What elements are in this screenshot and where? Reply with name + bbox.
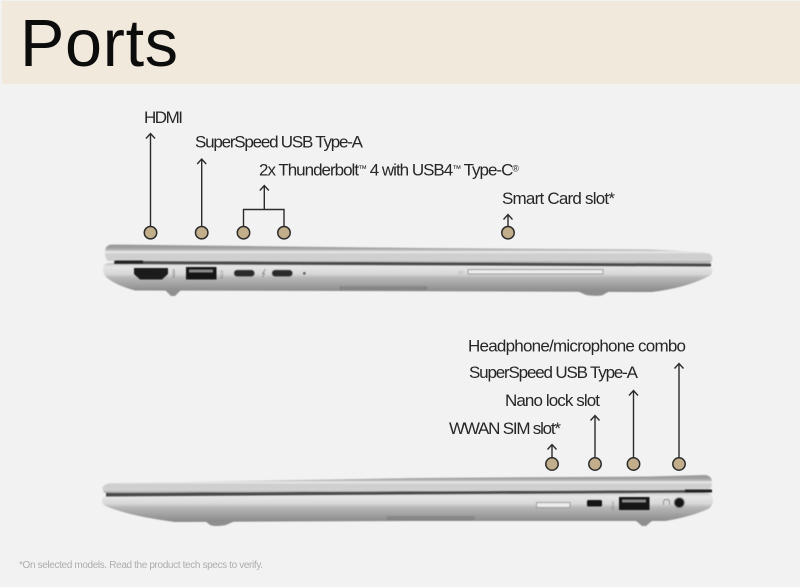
port: Thunderbolt 1 [234, 270, 254, 276]
callout: Nano lock slot [505, 391, 601, 470]
callout: SuperSpeed USB Type-A (right): SuperSpeed USB Type-A [469, 363, 639, 382]
callout: Thunderbolt: Type-C [460, 160, 513, 180]
icon: headphone [664, 500, 670, 505]
callout: SuperSpeed USB Type-A (left): SuperSpeed USB Type-A [195, 132, 364, 152]
callout: SuperSpeed USB Type-A (left) [195, 132, 364, 239]
laptop: right side view [102, 475, 713, 526]
lid [102, 475, 712, 493]
lid [105, 244, 713, 263]
callout: Nano lock slot: Nano lock slot [505, 391, 600, 410]
callout: Thunderbolt: ™ [358, 164, 367, 174]
SC marking: SC [458, 270, 465, 275]
port: USB Type-A [619, 497, 650, 510]
foot: left side front [164, 289, 182, 296]
callout: HDMI: HDMI [144, 108, 183, 127]
icon: Thunderbolt [262, 269, 266, 277]
base [103, 263, 712, 292]
callout: Headphone/microphone combo: Headphone/microphone combo [468, 336, 686, 356]
foot: right side rear [205, 521, 235, 526]
HDMI marking: HDMI [172, 269, 176, 278]
foot: right side front [635, 520, 653, 526]
callout: Thunderbolt: ® [512, 164, 519, 174]
port: Thunderbolt 2 [272, 270, 292, 276]
title: Ports [20, 7, 178, 81]
port: Nano lock slot [587, 500, 602, 506]
callout: WWAN SIM slot: WWAN SIM slot* [449, 419, 561, 438]
port: WWAN SIM slot [536, 502, 570, 508]
callout: Thunderbolt: 2x Thunderbolt [259, 160, 359, 180]
callout: Thunderbolt: ™ [452, 164, 461, 174]
callout: WWAN SIM slot [449, 419, 561, 470]
USB marking: SS10 [220, 270, 224, 279]
footnote: *On selected models. Read the product tech specs to verify. [19, 560, 263, 571]
USB marking: SS10 [611, 501, 615, 510]
port: USB Type-A [186, 267, 216, 280]
callout: SuperSpeed USB Type-A (right) [469, 363, 640, 470]
foot: left side rear [577, 291, 610, 296]
hinge detail [115, 260, 143, 264]
callout: Thunderbolt: 4 with USB4 [366, 160, 453, 180]
hinge seam [114, 261, 711, 266]
port: HDMI [134, 268, 168, 280]
callout: Smart Card slot: Smart Card slot* [502, 189, 615, 208]
status light [303, 272, 306, 275]
ventilation grille [340, 286, 428, 290]
callout: Thunderbolt [237, 160, 519, 239]
port: Smart Card slot [468, 270, 603, 274]
laptop: left side view [103, 244, 713, 296]
callout: HDMI [144, 108, 183, 239]
callout: Headphone/microphone combo [468, 336, 686, 470]
header band [2, 1, 800, 84]
hinge seam [106, 490, 706, 496]
port: audio jack [674, 498, 684, 508]
hinge detail [685, 490, 712, 492]
base [102, 492, 713, 522]
ventilation grille [387, 516, 474, 520]
callout: Smart Card slot [502, 189, 615, 239]
